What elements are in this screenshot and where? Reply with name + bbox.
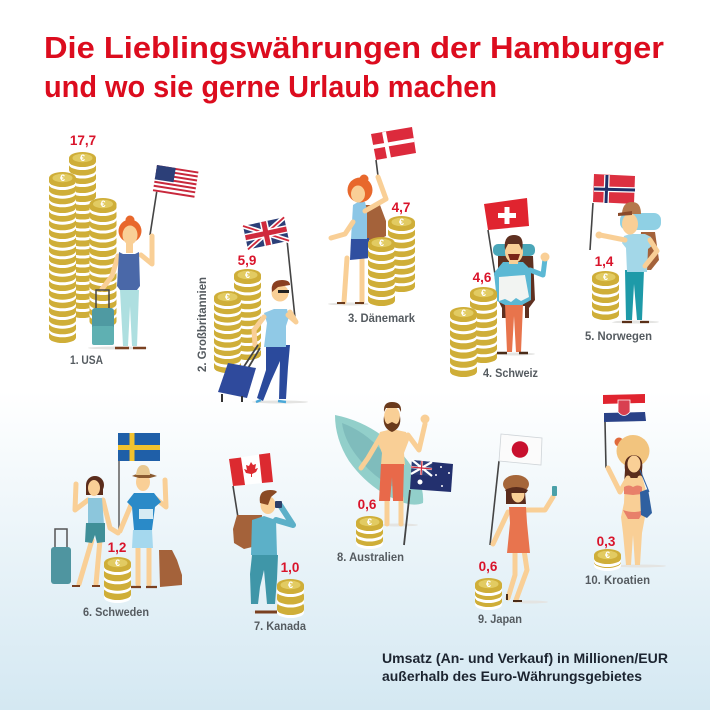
person: man with suitcase	[218, 280, 308, 404]
coin stack	[475, 578, 502, 610]
label: 9. Japan	[478, 614, 522, 626]
footnote: außerhalb des Euro-Währungsgebietes	[382, 668, 642, 684]
value: 4,7	[392, 200, 410, 215]
panel: 7 Kanada	[229, 453, 307, 633]
flag: Canada	[229, 453, 273, 530]
coin stacks: €	[80, 153, 85, 163]
label: 5. Norwegen	[585, 331, 652, 343]
footnote	[382, 650, 668, 684]
coin stack	[277, 579, 304, 618]
person: woman waving	[72, 476, 118, 586]
panel: 5 Norwegen	[585, 174, 661, 343]
value: 0,6	[358, 497, 377, 512]
coin stacks: €	[100, 199, 106, 209]
flag: UK	[243, 217, 295, 318]
value: 0,3	[597, 534, 616, 549]
panel: 10 Kroatien	[585, 394, 666, 587]
coin stacks: €	[245, 270, 250, 280]
flag: Sweden	[118, 433, 160, 530]
surfboard	[335, 415, 423, 505]
panel: 2 Großbritannien	[197, 217, 308, 404]
coin stack	[356, 516, 383, 549]
coin stack: €	[115, 558, 120, 568]
person: surfer	[361, 402, 430, 526]
coin stacks: €	[379, 238, 384, 248]
coin stacks: €	[461, 308, 466, 318]
person: woman with phone	[493, 475, 557, 604]
flag: Norway	[590, 174, 635, 250]
value: 1,4	[595, 254, 614, 269]
panel: 6 Schweden	[51, 433, 182, 619]
title: Die Lieblingswährungen der Hamburger	[44, 30, 664, 65]
panel: 4 Schweiz	[450, 198, 550, 380]
label: 1. USA	[70, 355, 103, 367]
value: 0,6	[479, 559, 498, 574]
coin stacks	[450, 287, 497, 380]
flag: USA	[150, 165, 198, 235]
coin stack: €	[605, 550, 610, 560]
coin stacks: €	[481, 288, 486, 298]
coin stack: €	[486, 579, 491, 589]
coin stacks: €	[60, 173, 65, 183]
label: 8. Australien	[337, 552, 404, 564]
coin stack	[104, 557, 131, 603]
label: 7. Kanada	[254, 621, 307, 633]
panel: 8 Australien	[335, 402, 453, 564]
coin stacks: €	[225, 292, 230, 302]
flag: Croatia	[603, 394, 646, 468]
flag: Japan	[490, 434, 542, 545]
person: man with camera	[120, 465, 166, 587]
panel: 1 USA	[49, 133, 198, 367]
value: 1,2	[108, 540, 126, 555]
person: hiker with cap	[596, 202, 661, 324]
panel: 9 Japan	[475, 434, 557, 626]
person: woman with suitcase	[88, 216, 152, 350]
coin stacks: €	[399, 217, 404, 227]
coin stacks	[368, 216, 415, 309]
label: 4. Schweiz	[483, 368, 538, 380]
label: 6. Schweden	[83, 607, 149, 619]
coin stack: €	[288, 580, 293, 590]
person: woman with backpack	[328, 174, 386, 306]
coin stack	[594, 549, 621, 571]
coin stack: €	[603, 272, 608, 282]
flag: Switzerland	[484, 198, 529, 287]
coin stacks	[214, 269, 261, 376]
label: 2. Großbritannien	[197, 277, 209, 372]
coin stack: €	[367, 517, 372, 527]
coin stack	[592, 271, 619, 323]
value: 4,6	[473, 270, 492, 285]
label: 10. Kroatien	[585, 575, 650, 587]
panel: 3 Dänemark	[328, 127, 416, 325]
value: 17,7	[70, 133, 96, 148]
label: 3. Dänemark	[348, 313, 416, 325]
flag: Australia	[404, 460, 453, 545]
person: backpacker	[493, 235, 550, 356]
flag: Denmark	[371, 127, 416, 176]
title: und wo sie gerne Urlaub machen	[44, 69, 497, 104]
title	[44, 30, 664, 104]
person: woman in bikini	[608, 435, 666, 568]
backpack	[159, 550, 182, 587]
suitcase	[51, 529, 71, 584]
value: 1,0	[281, 560, 299, 575]
value: 5,9	[238, 253, 256, 268]
footnote: Umsatz (An- und Verkauf) in Millionen/EUR	[382, 650, 668, 666]
person: photographer	[250, 490, 293, 614]
backpack	[233, 515, 262, 549]
coin stacks	[49, 152, 116, 346]
